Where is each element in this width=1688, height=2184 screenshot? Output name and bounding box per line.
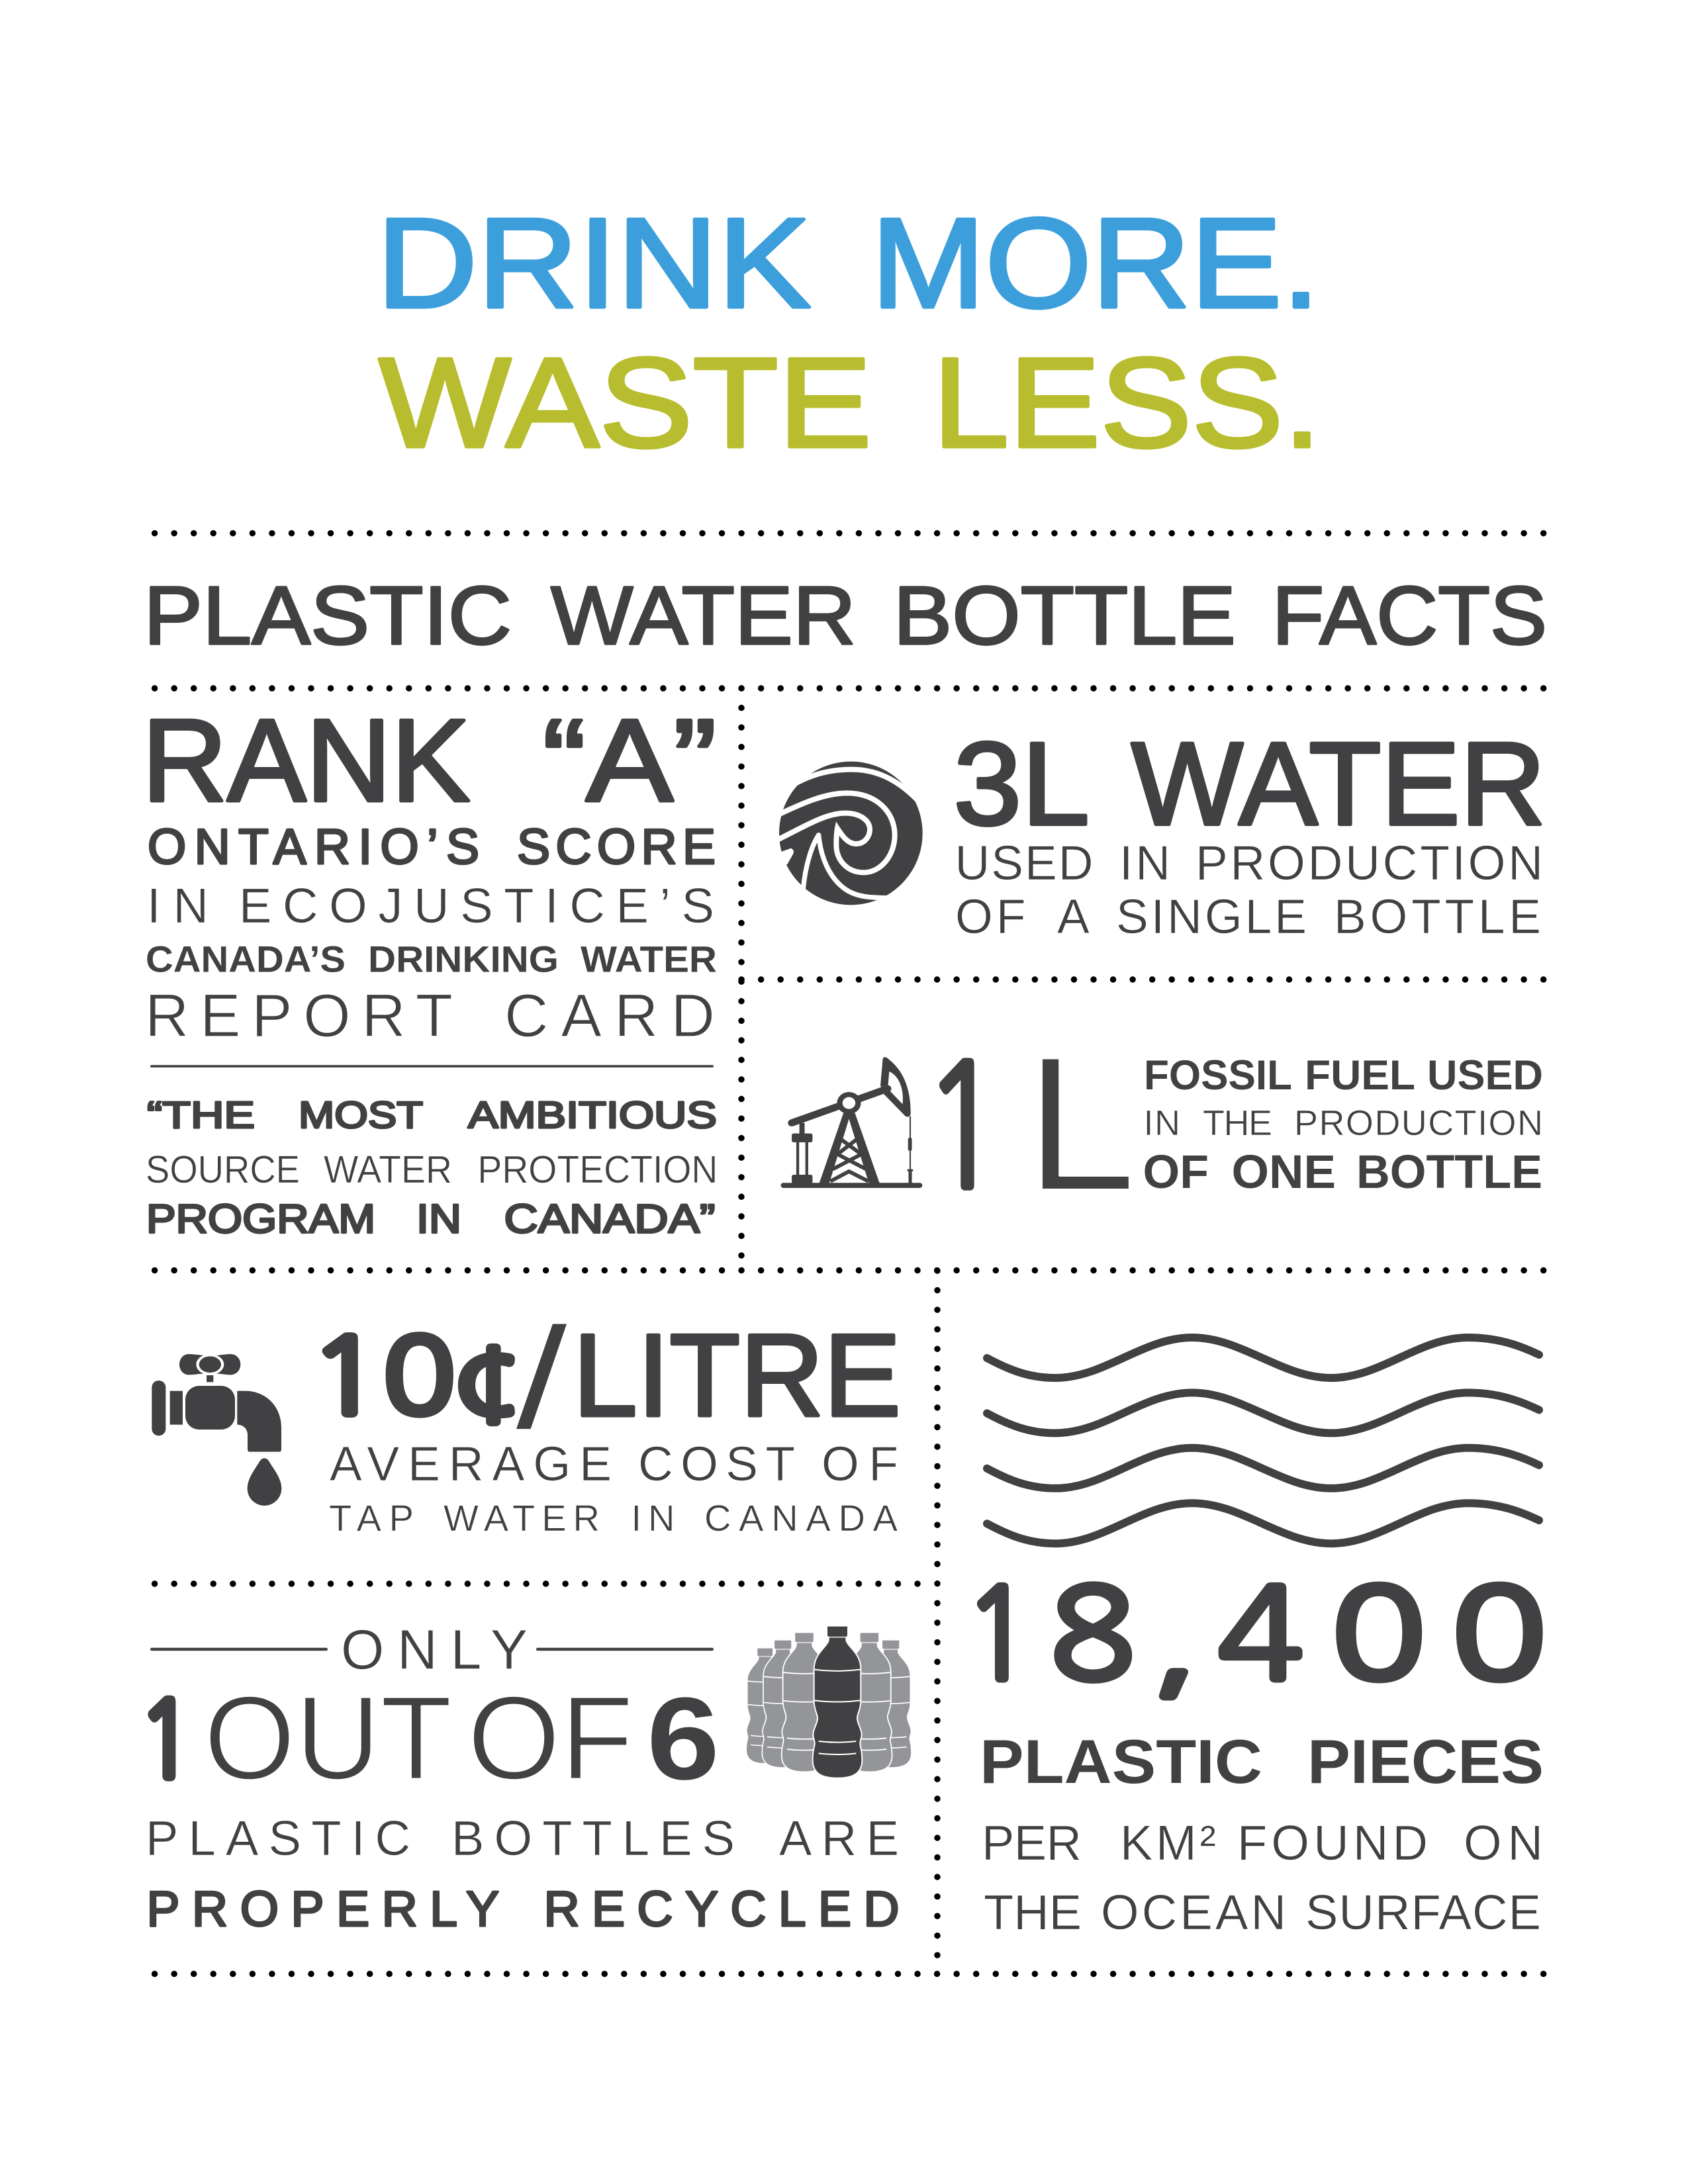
- text: average cost of tap water in Canada: CANADA: [704, 1497, 898, 1539]
- stat: 1 out of 6: [138, 1672, 720, 1805]
- stat: 1L: 1: [922, 1042, 1004, 1212]
- stat: 18,400: [964, 1572, 1548, 1698]
- text: fossil fuel used in the production of one bottle: PRODUCTION: [1294, 1103, 1543, 1143]
- stat: 10 cents per litre: [309, 1298, 901, 1458]
- heading: plastic water bottle facts: FACTS: [1272, 570, 1547, 662]
- text: fossil fuel used in the production of one bottle: FUEL: [1305, 1052, 1415, 1099]
- text: average cost of tap water in Canada: IN: [632, 1497, 675, 1539]
- title: MORE.: [871, 191, 1320, 334]
- stat: 1L: L: [1025, 1017, 1137, 1231]
- title: WASTE: [379, 331, 872, 474]
- icon: oil pump: [781, 1057, 922, 1188]
- quote: WATER: [324, 1148, 452, 1191]
- text: plastic bottles are properly recycled: [146, 1811, 899, 1936]
- text: Ontario's score: ONTARIO’S: [148, 819, 479, 874]
- quote: IN: [416, 1197, 461, 1242]
- panel: tap water cost: [152, 1298, 901, 1539]
- text: average cost of tap water in Canada: OF: [821, 1437, 898, 1491]
- stat: 1 out of 6: OF: [467, 1672, 633, 1805]
- text: per km2 found on the ocean surface: OCEAN: [1101, 1885, 1286, 1940]
- quote: AMBITIOUS: [468, 1094, 717, 1136]
- title: [377, 191, 1321, 474]
- text: average cost of tap water in Canada: AVERAGE: [330, 1437, 612, 1491]
- text: fossil fuel used in the production of one bottle: IN: [1144, 1103, 1180, 1143]
- panel: 3L water: [776, 718, 1546, 944]
- text: Canada's drinking water: CANADA’S: [146, 938, 346, 979]
- icon: bottles: [747, 1627, 911, 1778]
- text: used in production of a single bottle: IN: [1119, 837, 1170, 890]
- stat: 18,400: ,: [1151, 1572, 1197, 1698]
- quote: CANADA”: [504, 1197, 715, 1242]
- quote: “THE: [147, 1094, 255, 1136]
- text: plastic pieces: [980, 1727, 1544, 1796]
- stat: 1L: [922, 1017, 1137, 1231]
- stat: 3L water: WATER: [1131, 718, 1546, 850]
- stat: 18,400: 4: [1217, 1572, 1303, 1698]
- text: only: ONLY: [341, 1619, 528, 1681]
- text: used in production of a single bottle: PRODUCTION: [1196, 837, 1543, 890]
- text: plastic pieces: PIECES: [1307, 1727, 1544, 1796]
- stat: 10 cents per litre: /: [516, 1298, 567, 1458]
- quote: PROTECTION: [477, 1148, 718, 1191]
- quote: SOURCE: [146, 1148, 300, 1191]
- panel: rank A: [142, 695, 718, 1242]
- text: average cost of tap water in Canada: COST: [638, 1437, 795, 1491]
- text: average cost of tap water in Canada: TAP: [329, 1497, 414, 1539]
- text: plastic bottles are properly recycled: ARE: [779, 1811, 899, 1866]
- quote: MOST: [299, 1094, 423, 1136]
- text: Ontario's score: [148, 819, 716, 874]
- heading: plastic water bottle facts: WATER: [551, 570, 856, 662]
- text: plastic bottles are properly recycled: RECYCLED: [544, 1881, 899, 1936]
- text: report card: [145, 982, 715, 1050]
- stat: 18,400: 8: [1050, 1572, 1136, 1698]
- text: per km2 found on the ocean surface: SURFACE: [1305, 1885, 1541, 1940]
- text: fossil fuel used in the production of one bottle: ONE: [1231, 1146, 1336, 1199]
- text: per km2 found on the ocean surface: [982, 1815, 1543, 1940]
- stat: 3L water: [953, 718, 1546, 850]
- text: used in production of a single bottle: SINGLE: [1116, 890, 1307, 944]
- text: used in production of a single bottle: USED: [955, 837, 1094, 890]
- text: fossil fuel used in the production of one bottle: USED: [1427, 1052, 1543, 1099]
- text: used in production of a single bottle: OF: [955, 890, 1026, 944]
- text: report card: REPORT: [145, 982, 453, 1050]
- text: average cost of tap water in Canada: WATER: [444, 1497, 600, 1539]
- panel: ocean plastic: [964, 1338, 1548, 1940]
- text: per km2 found on the ocean surface: FOUND: [1237, 1815, 1428, 1870]
- stat: rank A: “A”: [543, 695, 716, 826]
- text: average cost of tap water in Canada: [329, 1437, 898, 1539]
- text: used in production of a single bottle: A: [1057, 890, 1090, 944]
- heading: plastic water bottle facts: BOTTLE: [894, 570, 1236, 662]
- stat: 18,400: 1: [964, 1572, 1033, 1698]
- divider rule: [150, 1065, 714, 1068]
- text: Canada's drinking water: DRINKING: [368, 938, 559, 979]
- text: Canada's drinking water: [146, 938, 717, 979]
- text: in Ecojustice's: ECOJUSTICE’S: [239, 878, 714, 933]
- icon: wave swirl: [776, 762, 923, 905]
- stat: rank A: RANK: [142, 695, 470, 826]
- text: fossil fuel used in the production of one bottle: THE: [1203, 1103, 1272, 1143]
- heading: plastic water bottle facts: PLASTIC: [144, 570, 512, 662]
- text: plastic bottles are properly recycled: BOTTLES: [451, 1811, 735, 1866]
- text: per km2 found on the ocean surface: PER: [982, 1815, 1082, 1870]
- icon: faucet: [152, 1354, 281, 1506]
- text: in Ecojustice's: IN: [147, 878, 209, 933]
- text: fossil fuel used in the production of one bottle: [1143, 1052, 1543, 1199]
- text: fossil fuel used in the production of one bottle: BOTTLE: [1356, 1146, 1542, 1199]
- stat: 1 out of 6: OUT: [204, 1672, 452, 1805]
- quote: PROGRAM: [146, 1197, 375, 1242]
- panel: 1L fossil fuel: [781, 1017, 1543, 1231]
- stat: 1 out of 6: 6: [647, 1673, 720, 1804]
- title: DRINK: [377, 191, 811, 334]
- quote: [146, 1094, 718, 1242]
- text: per km2 found on the ocean surface: KM²: [1120, 1815, 1216, 1870]
- text: per km2 found on the ocean surface: ON: [1464, 1815, 1543, 1870]
- text: Canada's drinking water: WATER: [581, 938, 717, 979]
- panel: recycling: [138, 1619, 911, 1936]
- text: Ontario's score: SCORE: [517, 819, 716, 874]
- text: per km2 found on the ocean surface: THE: [984, 1885, 1082, 1940]
- stat: 10 cents per litre: 10¢: [309, 1324, 514, 1429]
- text: plastic pieces: PLASTIC: [980, 1727, 1262, 1796]
- text: report card: CARD: [504, 982, 715, 1050]
- stat: 18,400: 0: [1331, 1572, 1427, 1698]
- icon: waves: [987, 1338, 1539, 1543]
- stat: 3L water: 3L: [953, 718, 1090, 850]
- stat: 10 cents per litre: LITRE: [573, 1310, 901, 1441]
- text: used in production of a single bottle: BOTTLE: [1334, 890, 1541, 944]
- text: only: [150, 1619, 714, 1681]
- heading: plastic water bottle facts: [144, 570, 1547, 662]
- stat: rank A: [142, 695, 716, 826]
- text: used in production of a single bottle: [955, 837, 1543, 944]
- text: plastic bottles are properly recycled: PROPERLY: [147, 1881, 499, 1936]
- text: fossil fuel used in the production of one bottle: OF: [1143, 1146, 1209, 1199]
- title: LESS.: [933, 331, 1321, 474]
- stat: 1 out of 6: 1: [138, 1688, 194, 1792]
- text: plastic bottles are properly recycled: PLASTIC: [146, 1811, 410, 1866]
- stat: 18,400: 0: [1451, 1572, 1548, 1698]
- text: fossil fuel used in the production of one bottle: FOSSIL: [1144, 1052, 1292, 1099]
